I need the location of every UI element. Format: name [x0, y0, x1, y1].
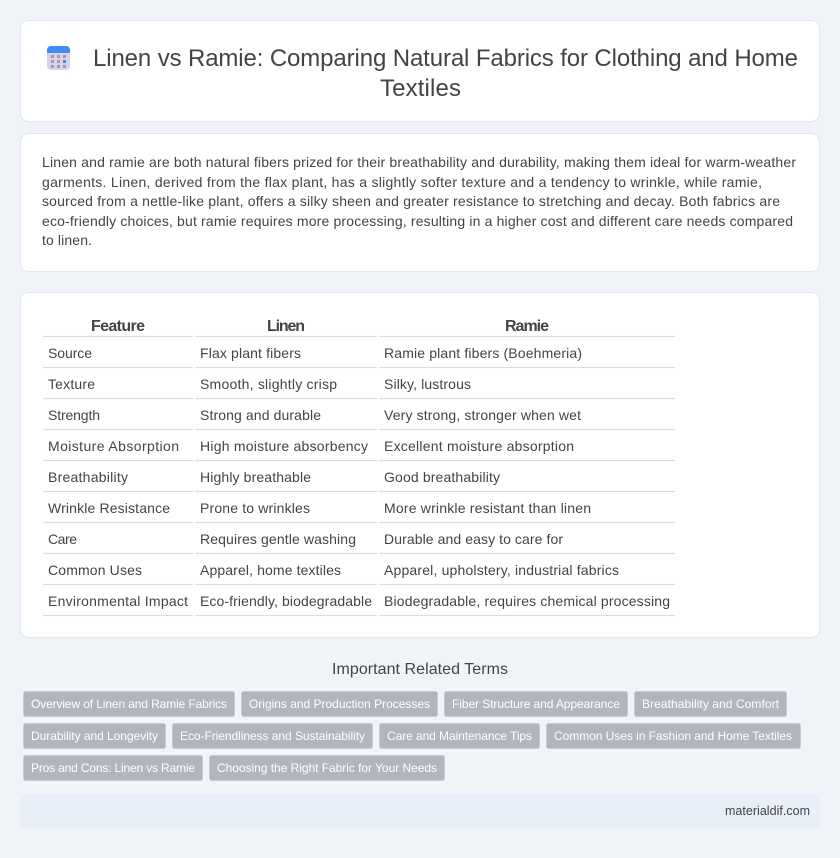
table rows: Smooth, slightly crisp: [200, 376, 337, 392]
table header: Feature: [91, 318, 145, 335]
table rows: Prone to wrinkles: [200, 500, 310, 516]
panel: header: [20, 20, 820, 122]
table header: Ramie: [505, 318, 549, 335]
tags: related terms: Eco-Friendliness and Sustainability: [180, 729, 365, 743]
icon: calendar: [47, 46, 70, 70]
table rows: More wrinkle resistant than linen: [384, 500, 591, 516]
text block: introduction paragraph: to linen.: [42, 232, 92, 248]
tags: related terms: Overview of Linen and Ramie Fabrics: [31, 697, 227, 711]
text block: introduction paragraph: [42, 154, 796, 248]
tags: related terms: Care and Maintenance Tips: [387, 729, 532, 743]
table rows: Eco-friendly, biodegradable: [200, 593, 372, 609]
table rows: Wrinkle Resistance: [48, 500, 170, 516]
table rows: Common Uses: [48, 562, 142, 578]
table rows: Biodegradable, requires chemical processing: [384, 593, 670, 609]
table rows: Very strong, stronger when wet: [384, 407, 581, 423]
text block: introduction paragraph: garments. Linen, derived from the flax plant, has a slightly softer texture and a tendency to wrinkle, while ramie,: [42, 174, 762, 190]
text block: introduction paragraph: eco-friendly choices, but ramie requires more processing, resulting in a higher cost and different care needs compared: [42, 213, 793, 229]
table rows: High moisture absorbency: [200, 438, 368, 454]
table rows: Durable and easy to care for: [384, 531, 563, 547]
table rows: Strong and durable: [200, 407, 321, 423]
text block: introduction paragraph: sourced from a nettle-like plant, offers a silky sheen and greater resistance to stretching and decay. Both fabrics are: [42, 193, 780, 209]
table rows: Breathability: [48, 469, 128, 485]
title: Linen vs Ramie: Comparing Natural Fabrics for Clothing and Home: [93, 45, 798, 72]
footer: [20, 794, 820, 828]
table rows: Good breathability: [384, 469, 500, 485]
table rows: Moisture Absorption: [48, 438, 179, 454]
table rows: Requires gentle washing: [200, 531, 356, 547]
tags: related terms: Pros and Cons: Linen vs Ramie: [31, 761, 195, 775]
tags: related terms: Fiber Structure and Appearance: [452, 697, 620, 711]
table header: Linen: [267, 318, 305, 335]
heading: related terms: Important Related Terms: [332, 661, 508, 678]
tags: related terms: [24, 692, 800, 780]
title: Textiles: [380, 75, 461, 102]
text block: introduction paragraph: Linen and ramie are both natural fibers prized for their breathability and durability, making them ideal for warm-weather: [42, 154, 796, 170]
table rows: Apparel, home textiles: [200, 562, 341, 578]
table rows: Source: [48, 345, 92, 361]
table rows: Care: [48, 531, 77, 547]
table rows: Excellent moisture absorption: [384, 438, 574, 454]
table rows: Environmental Impact: [48, 593, 188, 609]
table rows: Ramie plant fibers (Boehmeria): [384, 345, 582, 361]
title: [93, 45, 798, 102]
table rows: Texture: [48, 376, 95, 392]
table rows: Silky, lustrous: [384, 376, 471, 392]
tags: related terms: Durability and Longevity: [31, 729, 158, 743]
table rows: Apparel, upholstery, industrial fabrics: [384, 562, 619, 578]
table header: [91, 318, 549, 335]
tags: related terms: Common Uses in Fashion and Home Textiles: [554, 729, 792, 743]
table rows: Flax plant fibers: [200, 345, 301, 361]
table rows: [48, 345, 670, 609]
tags: related terms: Origins and Production Processes: [249, 697, 430, 711]
table rows: Strength: [48, 407, 100, 423]
tags: related terms: Choosing the Right Fabric for Your Needs: [217, 761, 437, 775]
tags: related terms: Breathability and Comfort: [642, 697, 780, 711]
panel: comparison table: [20, 292, 820, 638]
table rows: Highly breathable: [200, 469, 311, 485]
panel: introduction: [20, 134, 820, 272]
footer: materialdif.com: [725, 804, 810, 818]
